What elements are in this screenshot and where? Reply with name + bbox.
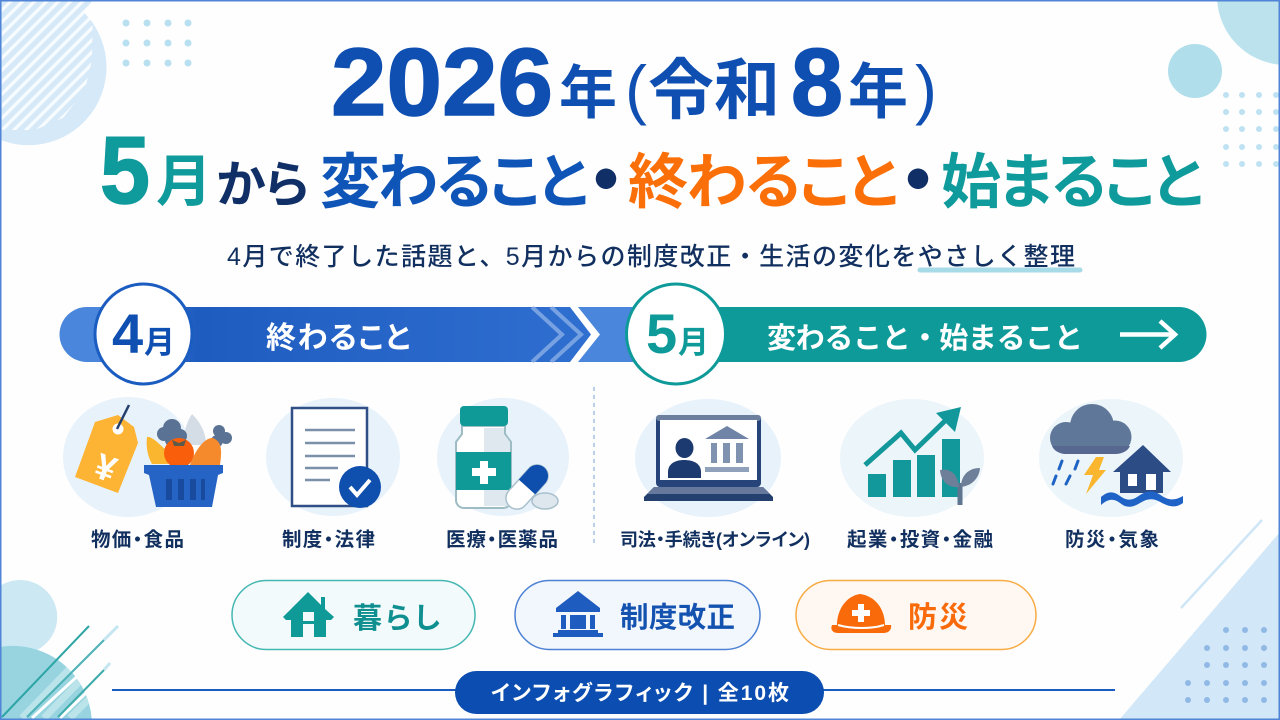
month badge: April: 4 [112,302,143,365]
decoration: top-left hatched circle [2,2,106,146]
decoration: bottom-left circles and diagonal lines [0,580,118,720]
timeline bar: April [59,307,640,362]
icon: price tag and food basket [63,397,232,517]
vegetables [147,414,232,468]
decoration: bottom-right dots [1185,627,1267,703]
title line 2 [100,117,1203,226]
title line 2: 変わること [320,149,588,216]
icon: government building [553,591,603,637]
decoration: top-left dots [122,20,192,66]
icon labels [91,529,1159,551]
icon labels: 司法・手続き(オンライン) [620,529,810,550]
timeline bar: May [640,307,1206,362]
title line 2: から [216,157,309,213]
footer pill [455,671,824,714]
icon labels: 物価・食品 [91,529,184,551]
arrow icon [1120,321,1175,348]
title line 2: ・ [878,137,958,226]
icon labels: 制度・法律 [282,529,375,551]
subtitle: 4月で終了した話題と、5月からの制度改正・生活の変化をやさしく整理 [227,243,1075,271]
title line 1: 年 [848,59,908,126]
title line 2: 終わること [628,149,898,216]
divider [593,387,595,547]
tag pill: 制度改正: 制度改正 [620,602,735,634]
icon: medicine bottle and capsule [437,398,569,516]
tag pill: 防災: 防災 [908,601,968,634]
title line 2: 月 [156,150,212,213]
month badge: May [626,284,726,384]
timeline bar: May: 変わること・始まること [767,322,1083,355]
title line 1: 年 [559,61,617,126]
icon: house [283,592,334,637]
month badge: April [95,284,192,384]
icon: rising bar chart with sprout [840,399,984,517]
title line 2: 5 [100,117,150,224]
icon labels: 起業・投資・金融 [847,529,993,551]
tag pill: 暮らし [232,580,475,650]
title line 2: 始まること [941,149,1203,216]
tag pill: 暮らし: 暮らし [353,602,440,635]
title line 1: ( [625,52,647,126]
title line 1: ) [915,52,937,126]
decoration: top-right circles [1168,0,1280,98]
decoration: bottom-right triangle [1119,520,1280,720]
timeline bar: April: 終わること [266,322,410,355]
title line 1 [331,29,937,136]
title line 2: ・ [566,137,646,226]
decoration: top-right dots [1223,92,1279,167]
tag pill: 制度改正 [515,580,760,650]
icon: helmet [831,594,891,633]
tag pill: 防災 [796,580,1036,650]
price tag: ¥ [89,445,122,490]
title line 1: 8 [791,29,843,136]
month badge: May: 5 [646,302,677,365]
icon labels: 医療・医薬品 [446,529,558,551]
month badge: May: 月 [678,325,709,360]
icon: storm cloud and flooded house [1039,399,1183,517]
footer rule [112,689,1115,691]
title line 1: 令和 [648,53,780,127]
icon: document with check [266,398,400,516]
price tag [75,405,138,493]
title line 1: 2026 [331,29,553,136]
footer pill: インフォグラフィック | 全10枚 [491,681,789,705]
basket [144,465,223,507]
icon labels: 防災・気象 [1065,529,1159,551]
month badge: April: 月 [144,325,175,360]
icon: laptop with person and court building [635,399,781,517]
